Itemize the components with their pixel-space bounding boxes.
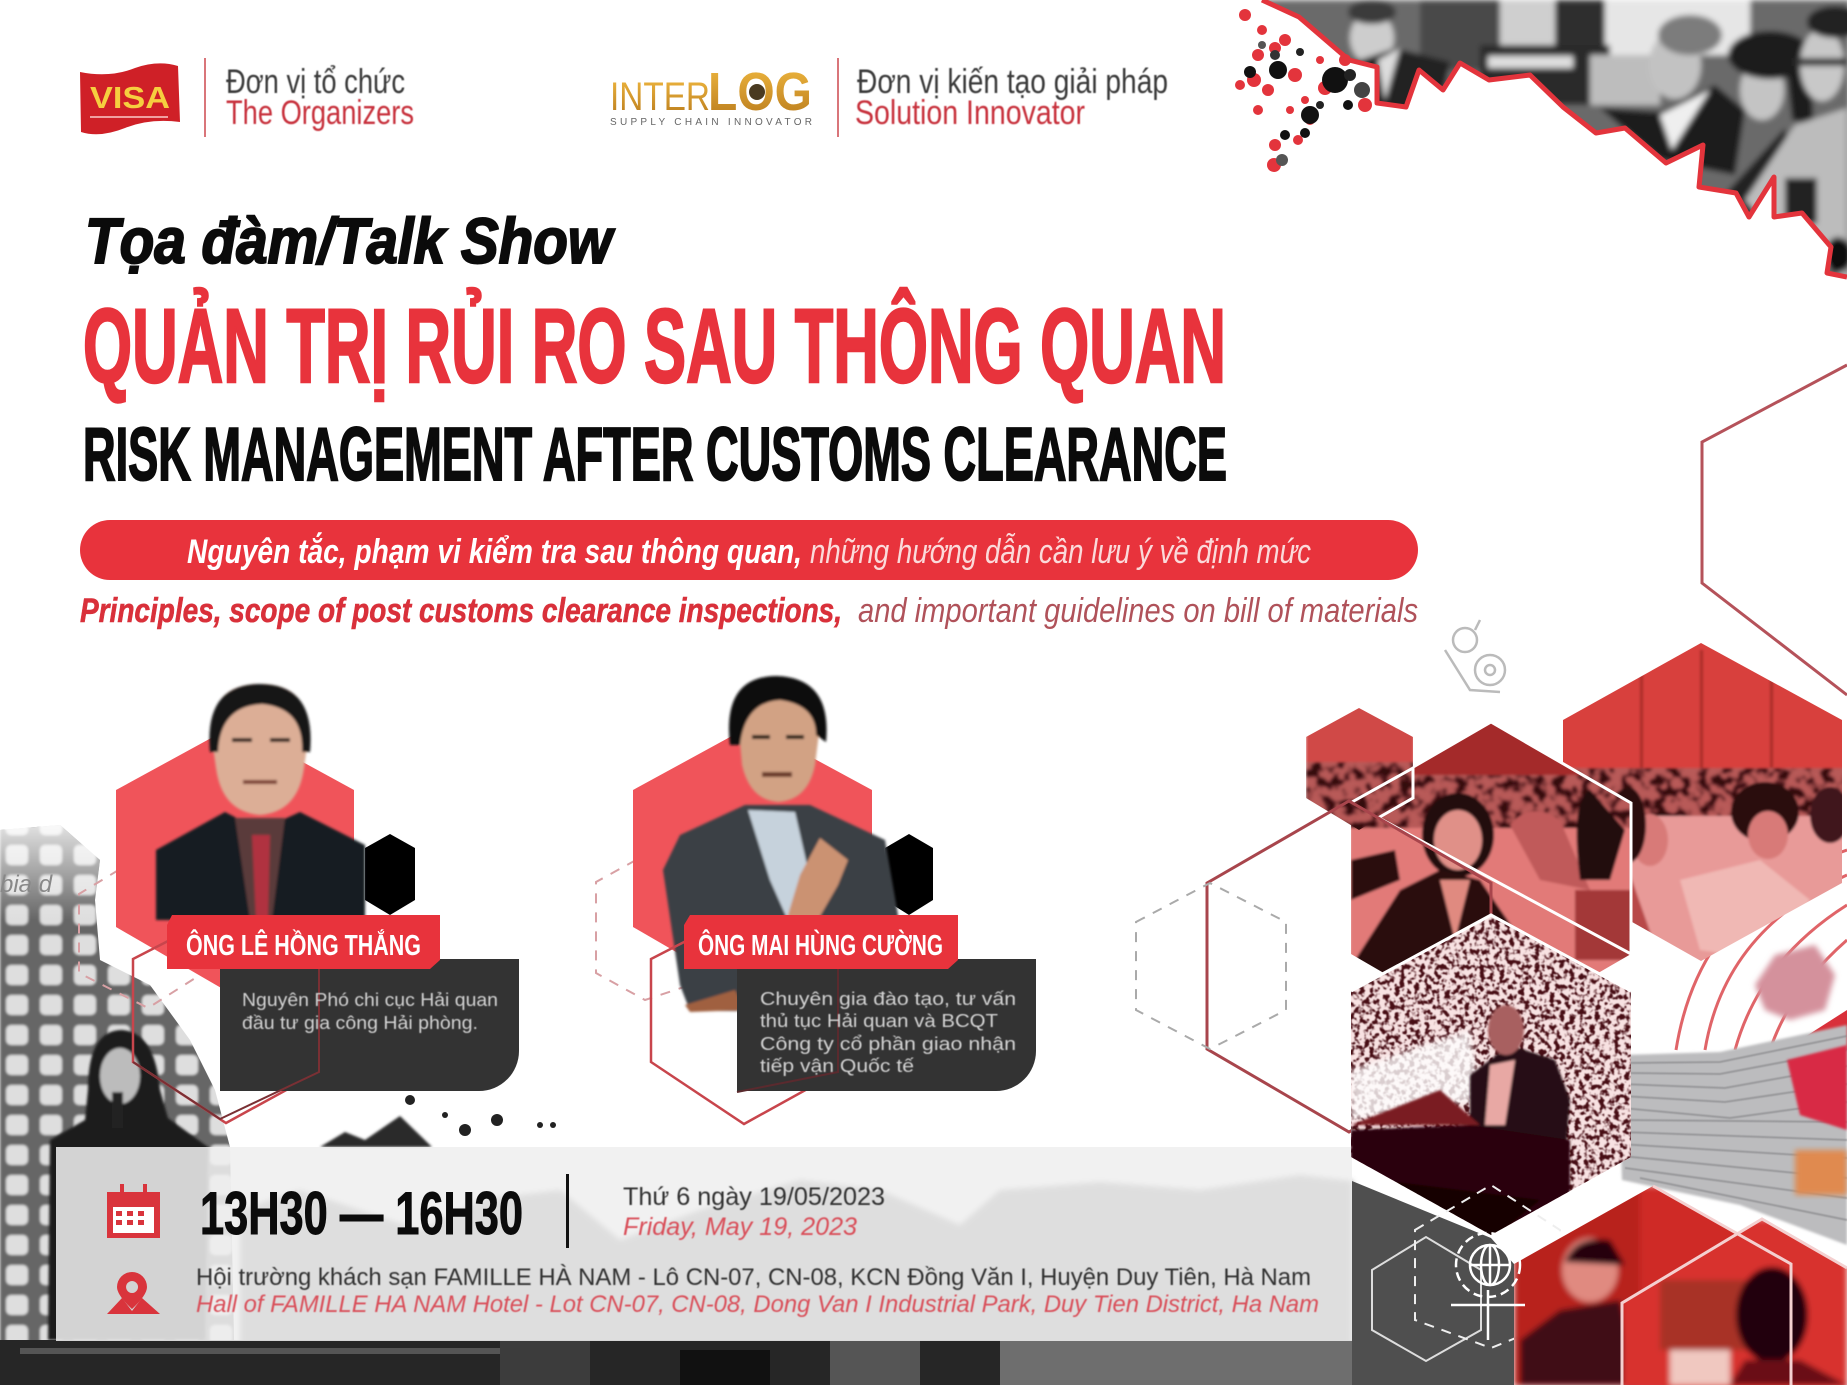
logo: INTERLOG: INTER <box>610 75 710 119</box>
photo: paper stack <box>1620 1025 1847 1245</box>
date: Thứ 6 ngày 19/05/2023 <box>623 1183 885 1211</box>
torn red edge <box>1262 0 1847 277</box>
portrait <box>663 676 898 1012</box>
red hexagon <box>633 725 872 996</box>
dashed white hexagon <box>1415 1185 1560 1348</box>
photo: city grid lower left: bia d <box>0 871 53 898</box>
logo: INTERLOG <box>610 62 812 128</box>
speaker 2 <box>596 676 1036 1124</box>
divider <box>204 58 206 137</box>
bio: tiếp vận Quốc tế <box>760 1056 914 1076</box>
photo: audience top right <box>1235 0 1847 280</box>
portrait <box>156 684 365 920</box>
dashed hexagon far left <box>1136 883 1286 1049</box>
outline hexagon <box>651 940 838 1124</box>
red hexagon <box>116 725 354 996</box>
icon: location pin <box>107 1272 160 1314</box>
photo hexagon: man E <box>1514 1186 1800 1385</box>
speaker 1 <box>79 684 519 1123</box>
organizers text: Đơn vị tổ chức <box>226 63 405 101</box>
photo: city grid lower left <box>0 820 556 1385</box>
logo: VISA: VISA <box>90 80 170 115</box>
logo: VISA <box>80 63 180 134</box>
skyline behind panel <box>240 1175 1352 1385</box>
subtitle english: Principles, scope of post customs clearance inspections, <box>80 592 842 630</box>
icon: calendar <box>107 1184 160 1238</box>
address: Hall of FAMILLE HA NAM Hotel - Lot CN-07, CN-08, Dong Van I Industrial Park, Duy Tien District, Ha Nam <box>196 1291 1319 1318</box>
bio: đầu tư gia công Hải phòng. <box>242 1013 478 1033</box>
organizers text: The Organizers <box>226 94 414 132</box>
date: Friday, May 19, 2023 <box>623 1213 857 1241</box>
photo hexagon: woman F <box>1622 1186 1847 1385</box>
solution innovator text: Đơn vị kiến tạo giải pháp <box>857 63 1168 101</box>
solution innovator text <box>855 63 1168 132</box>
white outline hexagon bottom <box>1372 1237 1481 1361</box>
dark text box <box>737 959 1036 1091</box>
name tag: ÔNG LÊ HỒNG THẮNG <box>186 928 421 962</box>
bio: thủ tục Hải quan và BCQT <box>760 1011 998 1031</box>
splatter <box>1235 9 1372 172</box>
bio: Nguyên Phó chi cục Hải quan <box>242 990 498 1010</box>
heading: talk show: Tọa đàm/Talk Show <box>85 205 616 277</box>
bio <box>760 989 1016 1076</box>
photo hexagon: crowd A <box>1306 706 1414 832</box>
photo hexagon: crowd B <box>1351 724 1632 972</box>
subtitle pill <box>80 520 1418 580</box>
name tag <box>684 915 958 969</box>
logo: INTERLOG: LOG <box>708 62 812 122</box>
subtitle english: and important guidelines on bill of materials <box>858 592 1418 630</box>
name tag: ÔNG MAI HÙNG CƯỜNG <box>698 928 943 962</box>
panel: time and location <box>56 1147 1352 1341</box>
divider <box>566 1174 569 1248</box>
address <box>196 1264 1319 1318</box>
name tag <box>167 915 440 969</box>
organizers text <box>226 63 414 132</box>
bio: Công ty cổ phần giao nhận <box>760 1034 1016 1054</box>
photo hexagon: crowd D <box>1560 640 1847 966</box>
address: Hội trường khách sạn FAMILLE HÀ NAM - Lô CN-07, CN-08, KCN Đồng Văn I, Huyện Duy Tiên, Hà Nam <box>196 1264 1311 1291</box>
dashed hexagon <box>596 860 690 1000</box>
subtitle pill: Nguyên tắc, phạm vi kiểm tra sau thông quan, <box>187 533 802 571</box>
divider <box>837 58 839 137</box>
outline hexagon inside box <box>133 965 319 1119</box>
dashed hexagon <box>79 860 200 1008</box>
black hexagon <box>885 834 933 915</box>
logo: INTERLOG: SUPPLY CHAIN INNOVATOR <box>610 117 812 128</box>
outline hexagon left of photos <box>1207 801 1491 1132</box>
time: 13H30 — 16H30 <box>200 1180 523 1247</box>
icon: map pins <box>1445 620 1505 692</box>
dark text box <box>220 959 519 1091</box>
outline hexagon inside box <box>737 969 838 1092</box>
solution innovator text: Solution Innovator <box>855 94 1085 132</box>
photo: red curves and hand <box>1676 850 1847 1050</box>
dark band bottom <box>0 1181 1514 1385</box>
bio <box>242 990 498 1033</box>
outline hexagon top right <box>1702 365 1847 695</box>
outline hexagon <box>133 940 319 1123</box>
bio: Chuyên gia đào tạo, tư vấn <box>760 989 1016 1009</box>
woman with microphone <box>48 1030 208 1340</box>
black hexagon <box>365 834 415 915</box>
ink splash <box>320 1116 432 1147</box>
subtitle pill: những hướng dẫn cần lưu ý về định mức <box>810 533 1311 571</box>
photo hexagon: speaker at podium C <box>1350 915 1635 1240</box>
icon: globe gear <box>1451 1233 1525 1340</box>
date <box>623 1183 885 1241</box>
subtitle english <box>80 592 1418 630</box>
